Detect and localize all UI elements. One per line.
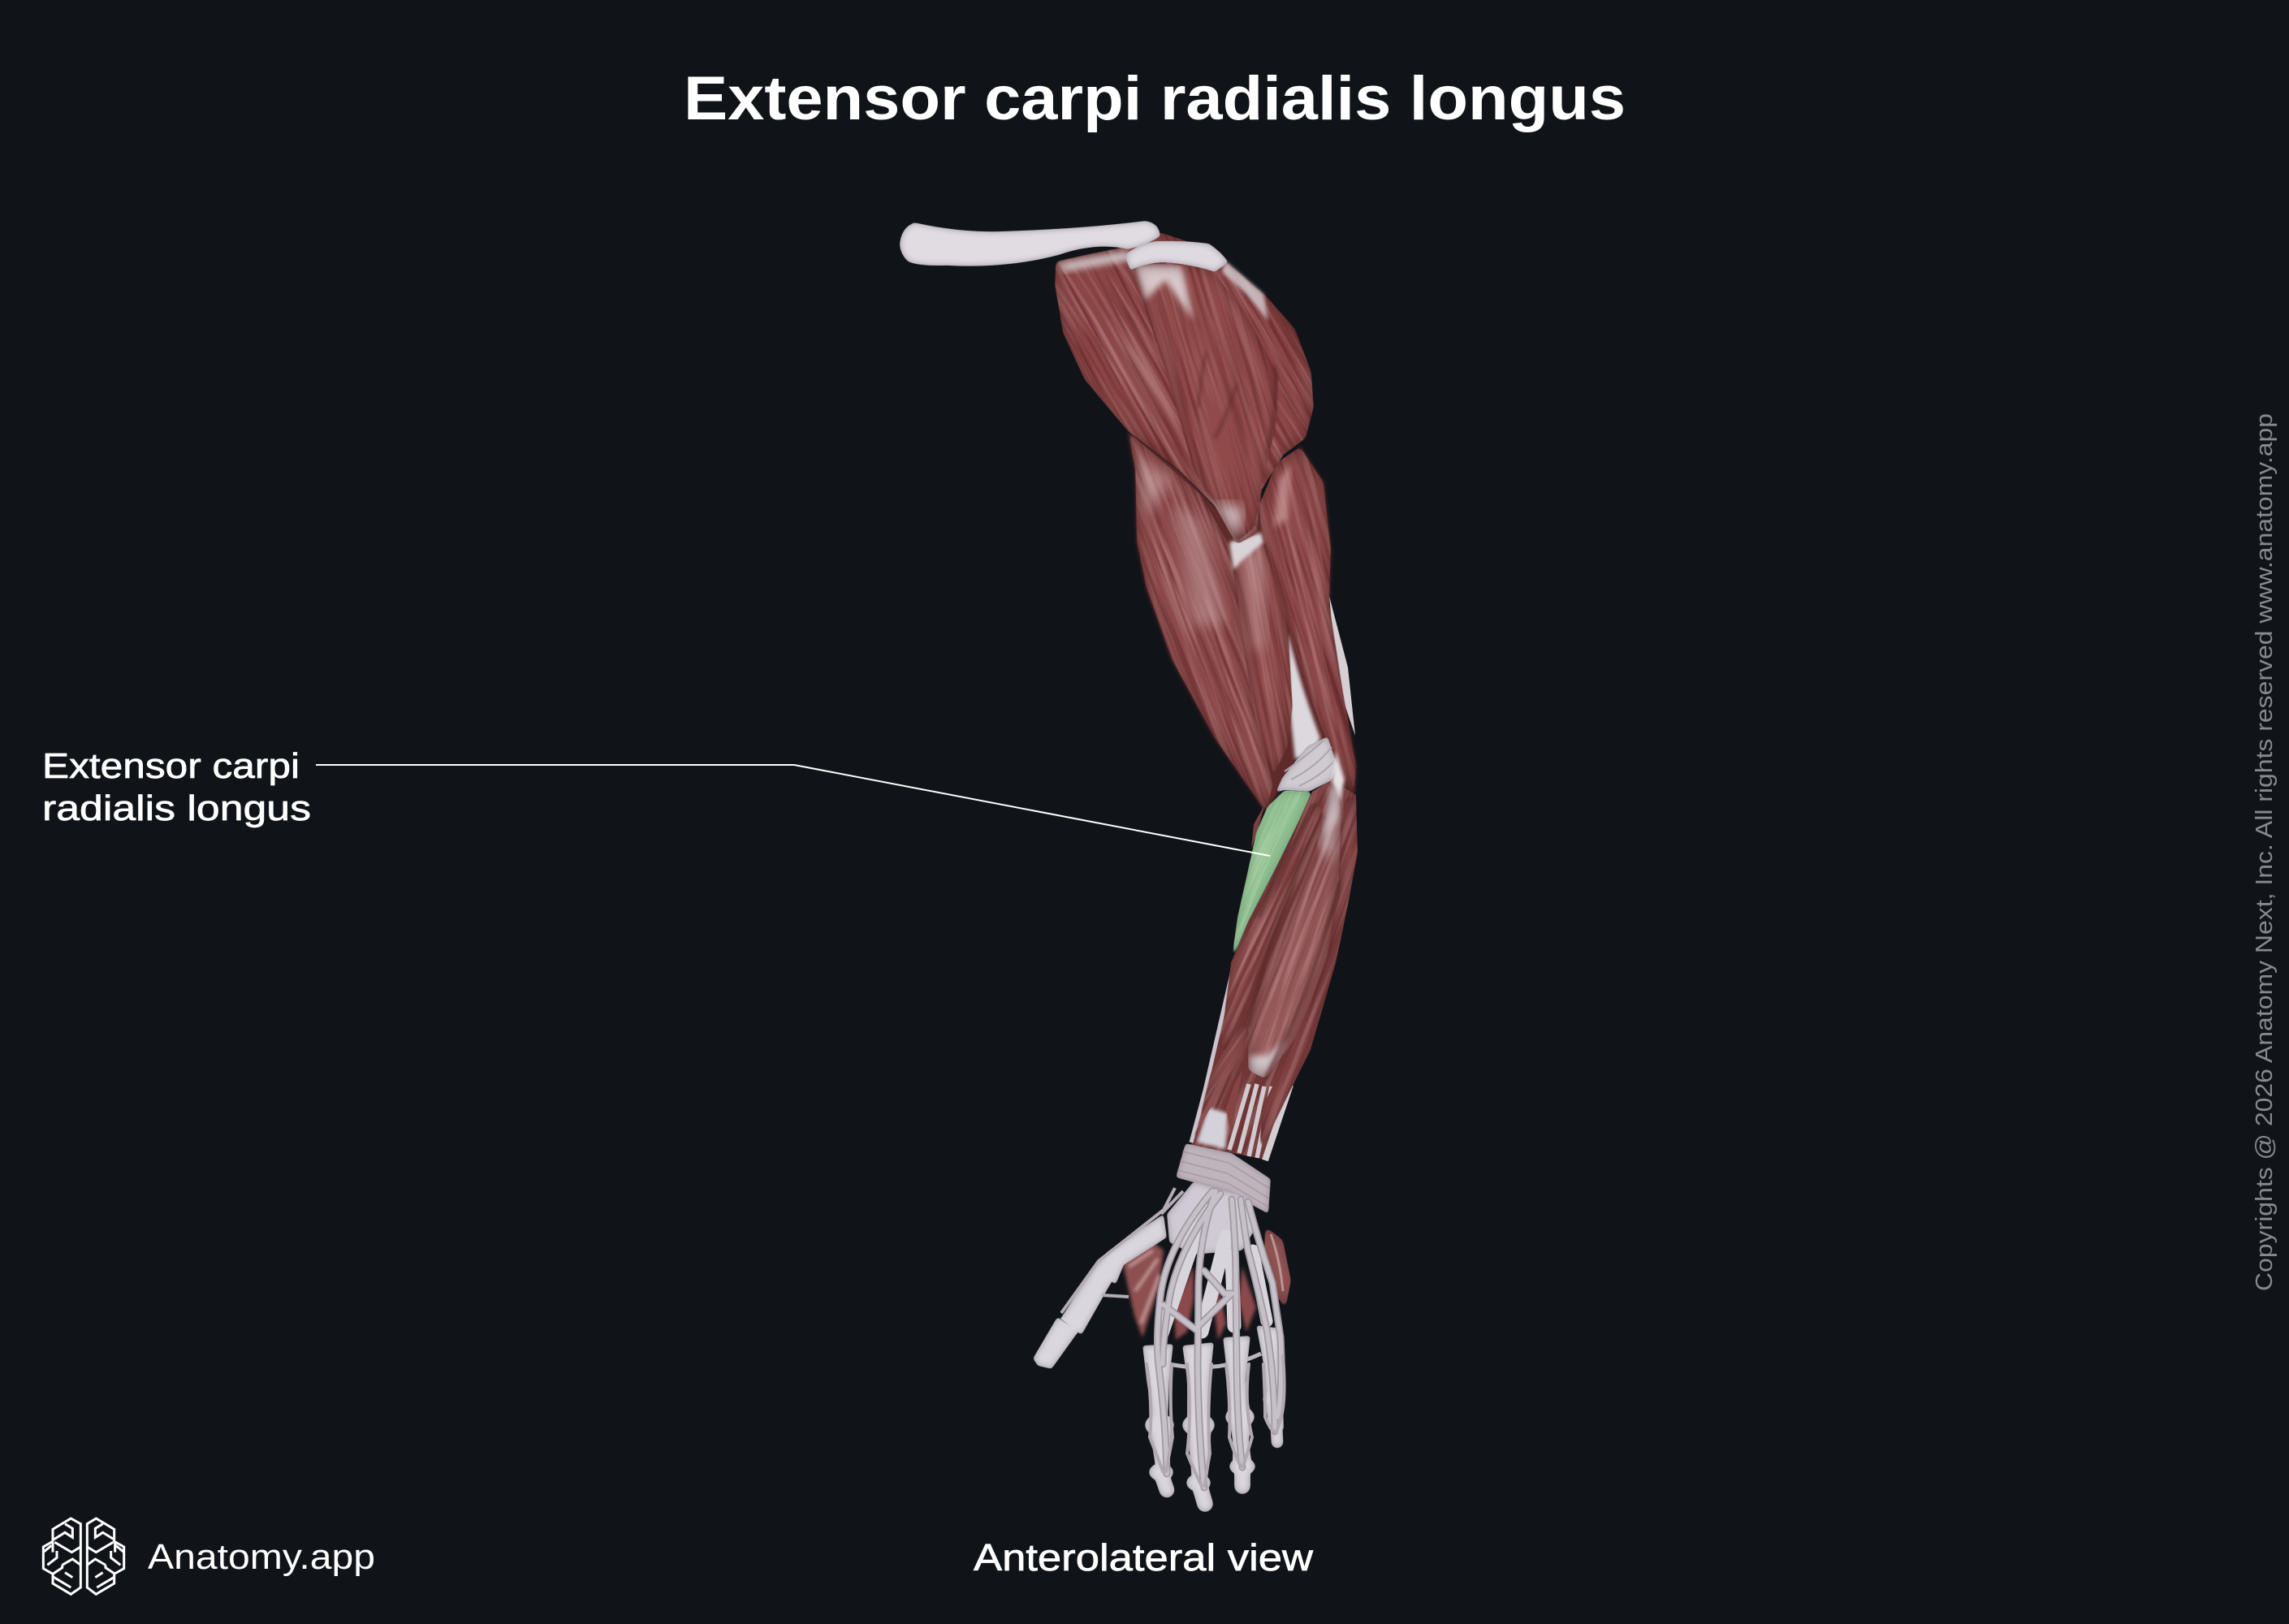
anatomical illustration: arm <box>900 221 1358 1512</box>
tendon white at biceps insertion <box>1229 533 1263 570</box>
middle finger <box>1182 1342 1215 1504</box>
view caption: Anterolateral view <box>974 1536 1314 1579</box>
extensor tendons of the hand <box>1147 1191 1285 1488</box>
clavicle <box>900 221 1160 266</box>
extensor retinaculum band <box>1176 1143 1271 1214</box>
brand name: Anatomy.app <box>148 1537 375 1577</box>
deltoid <box>1055 232 1314 543</box>
deltoid grooves <box>1198 352 1276 455</box>
forearm deep bone and tendons <box>1191 960 1290 1160</box>
callout label: Extensor carpi radialis longus: radialis longus <box>42 788 311 828</box>
sliver of brachioradialis beside green muscle <box>1251 804 1265 849</box>
forearm silhouette base with fibres <box>1191 780 1358 1160</box>
deltoid tendon strip <box>1222 261 1268 321</box>
forearm muscle separations <box>1248 804 1339 1079</box>
forearm muscle: extensor carpi ulnaris <box>787 430 1828 1471</box>
copyright note: Copyrights @ 2026 Anatomy Next, Inc. All rights reserved www.anatomy.app <box>2252 413 2278 1291</box>
muscle: hypothenar <box>1264 1226 1291 1310</box>
muscle: thumb interosseous <box>1123 1242 1164 1337</box>
forearm muscle: abductor pollicis longus <box>653 507 1783 1624</box>
callout label: Extensor carpi radialis longus <box>42 746 311 828</box>
upper arm silhouette base <box>1128 431 1356 812</box>
forearm small deep muscles <box>1194 1064 1242 1137</box>
brachialis <box>1234 542 1293 771</box>
hand carpal bones <box>1167 1181 1257 1255</box>
white humerus strips <box>1288 596 1355 759</box>
forearm muscle: extensor carpi radialis brevis <box>736 387 1814 1465</box>
highlighted muscle: extensor carpi radialis longus (green) <box>723 333 1794 1405</box>
thumb tendons <box>1061 1188 1183 1313</box>
metacarpal bones <box>1161 1229 1267 1336</box>
common extensor origin tendon at elbow <box>1276 736 1345 836</box>
callout label: Extensor carpi radialis longus: Extensor carpi <box>42 746 300 786</box>
brachioradialis upper <box>1259 448 1356 788</box>
upper arm: triceps / biceps long muscle <box>1129 436 1273 807</box>
leader line <box>316 765 1270 856</box>
index finger <box>1142 1344 1174 1490</box>
forearm muscle: extensor digitorum <box>762 397 1820 1454</box>
acromion <box>1125 241 1229 272</box>
thumb <box>1033 1214 1167 1369</box>
little finger <box>1256 1325 1285 1442</box>
ring finger <box>1223 1336 1255 1486</box>
transverse band across knuckles <box>1169 1354 1261 1367</box>
icon: brain logo <box>43 1518 124 1594</box>
title: Extensor carpi radialis longus <box>684 64 1626 133</box>
muscles: interossei between metacarpals <box>1174 1267 1256 1340</box>
deltoid middle head <box>1132 263 1278 540</box>
